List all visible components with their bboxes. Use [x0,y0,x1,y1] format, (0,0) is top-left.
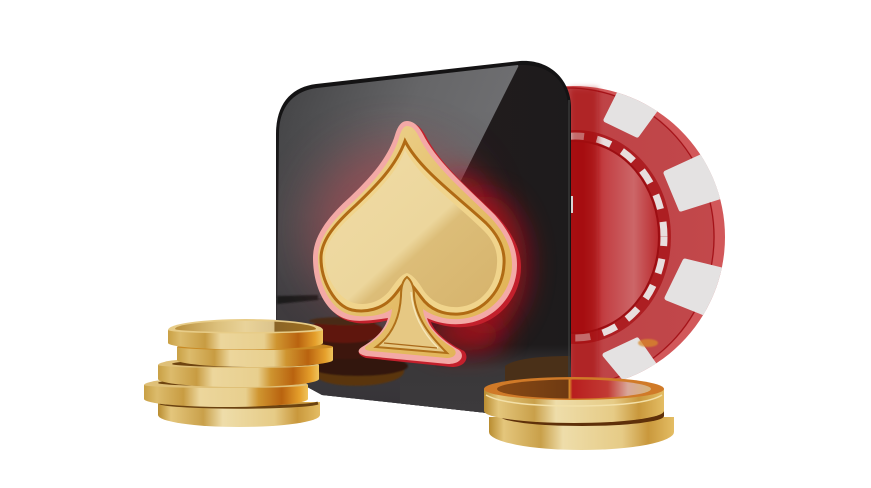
spade red depth [316,123,521,367]
gold reflection on chip [638,339,658,347]
face outline [566,87,715,378]
red glow base [427,319,503,351]
pink glow left [310,145,480,315]
red glow right [443,195,527,335]
glossy left face [277,65,518,413]
dark right reflection [431,65,568,364]
white chip blocks [605,94,730,385]
card right edge [568,100,570,378]
card body [276,61,571,415]
black glass card [276,61,572,420]
spade flat face [325,150,497,307]
outer ring [571,130,671,344]
reflected right coin [505,356,570,382]
spade base line [384,343,437,348]
upper coin top face [497,380,651,398]
coin 2 [177,342,333,367]
coin 1 [168,319,323,349]
chip edge [566,86,725,379]
spade pink outline [313,121,517,364]
reflected coins [305,317,408,386]
lower face shading [276,177,322,298]
red glow upper right [438,175,486,235]
right coin stack [484,377,674,450]
left coin stack [144,319,333,427]
inner disc [571,140,660,334]
gold spade [313,121,521,367]
chip face [566,87,715,378]
lower coin [489,410,674,450]
floor right [400,350,571,413]
dashed ring [571,132,668,342]
illustration: spade card with chip and coins [144,60,725,450]
chip shadow band [570,88,598,383]
spade orange rim line [321,141,504,314]
coin 4 [144,377,308,407]
spade stem [376,277,447,353]
small tab at card edge [571,196,573,213]
upper coin rim line [486,395,662,406]
card surface [276,65,572,420]
poker chip [566,84,725,379]
horizon shadow [277,295,318,304]
spade pale gold band [318,126,512,358]
coin 5 [158,402,320,427]
coin 3 [158,357,319,387]
floor band [276,298,485,413]
spade stem highlight [411,292,438,348]
upper coin [484,377,664,423]
coin 1 top face [175,321,316,332]
